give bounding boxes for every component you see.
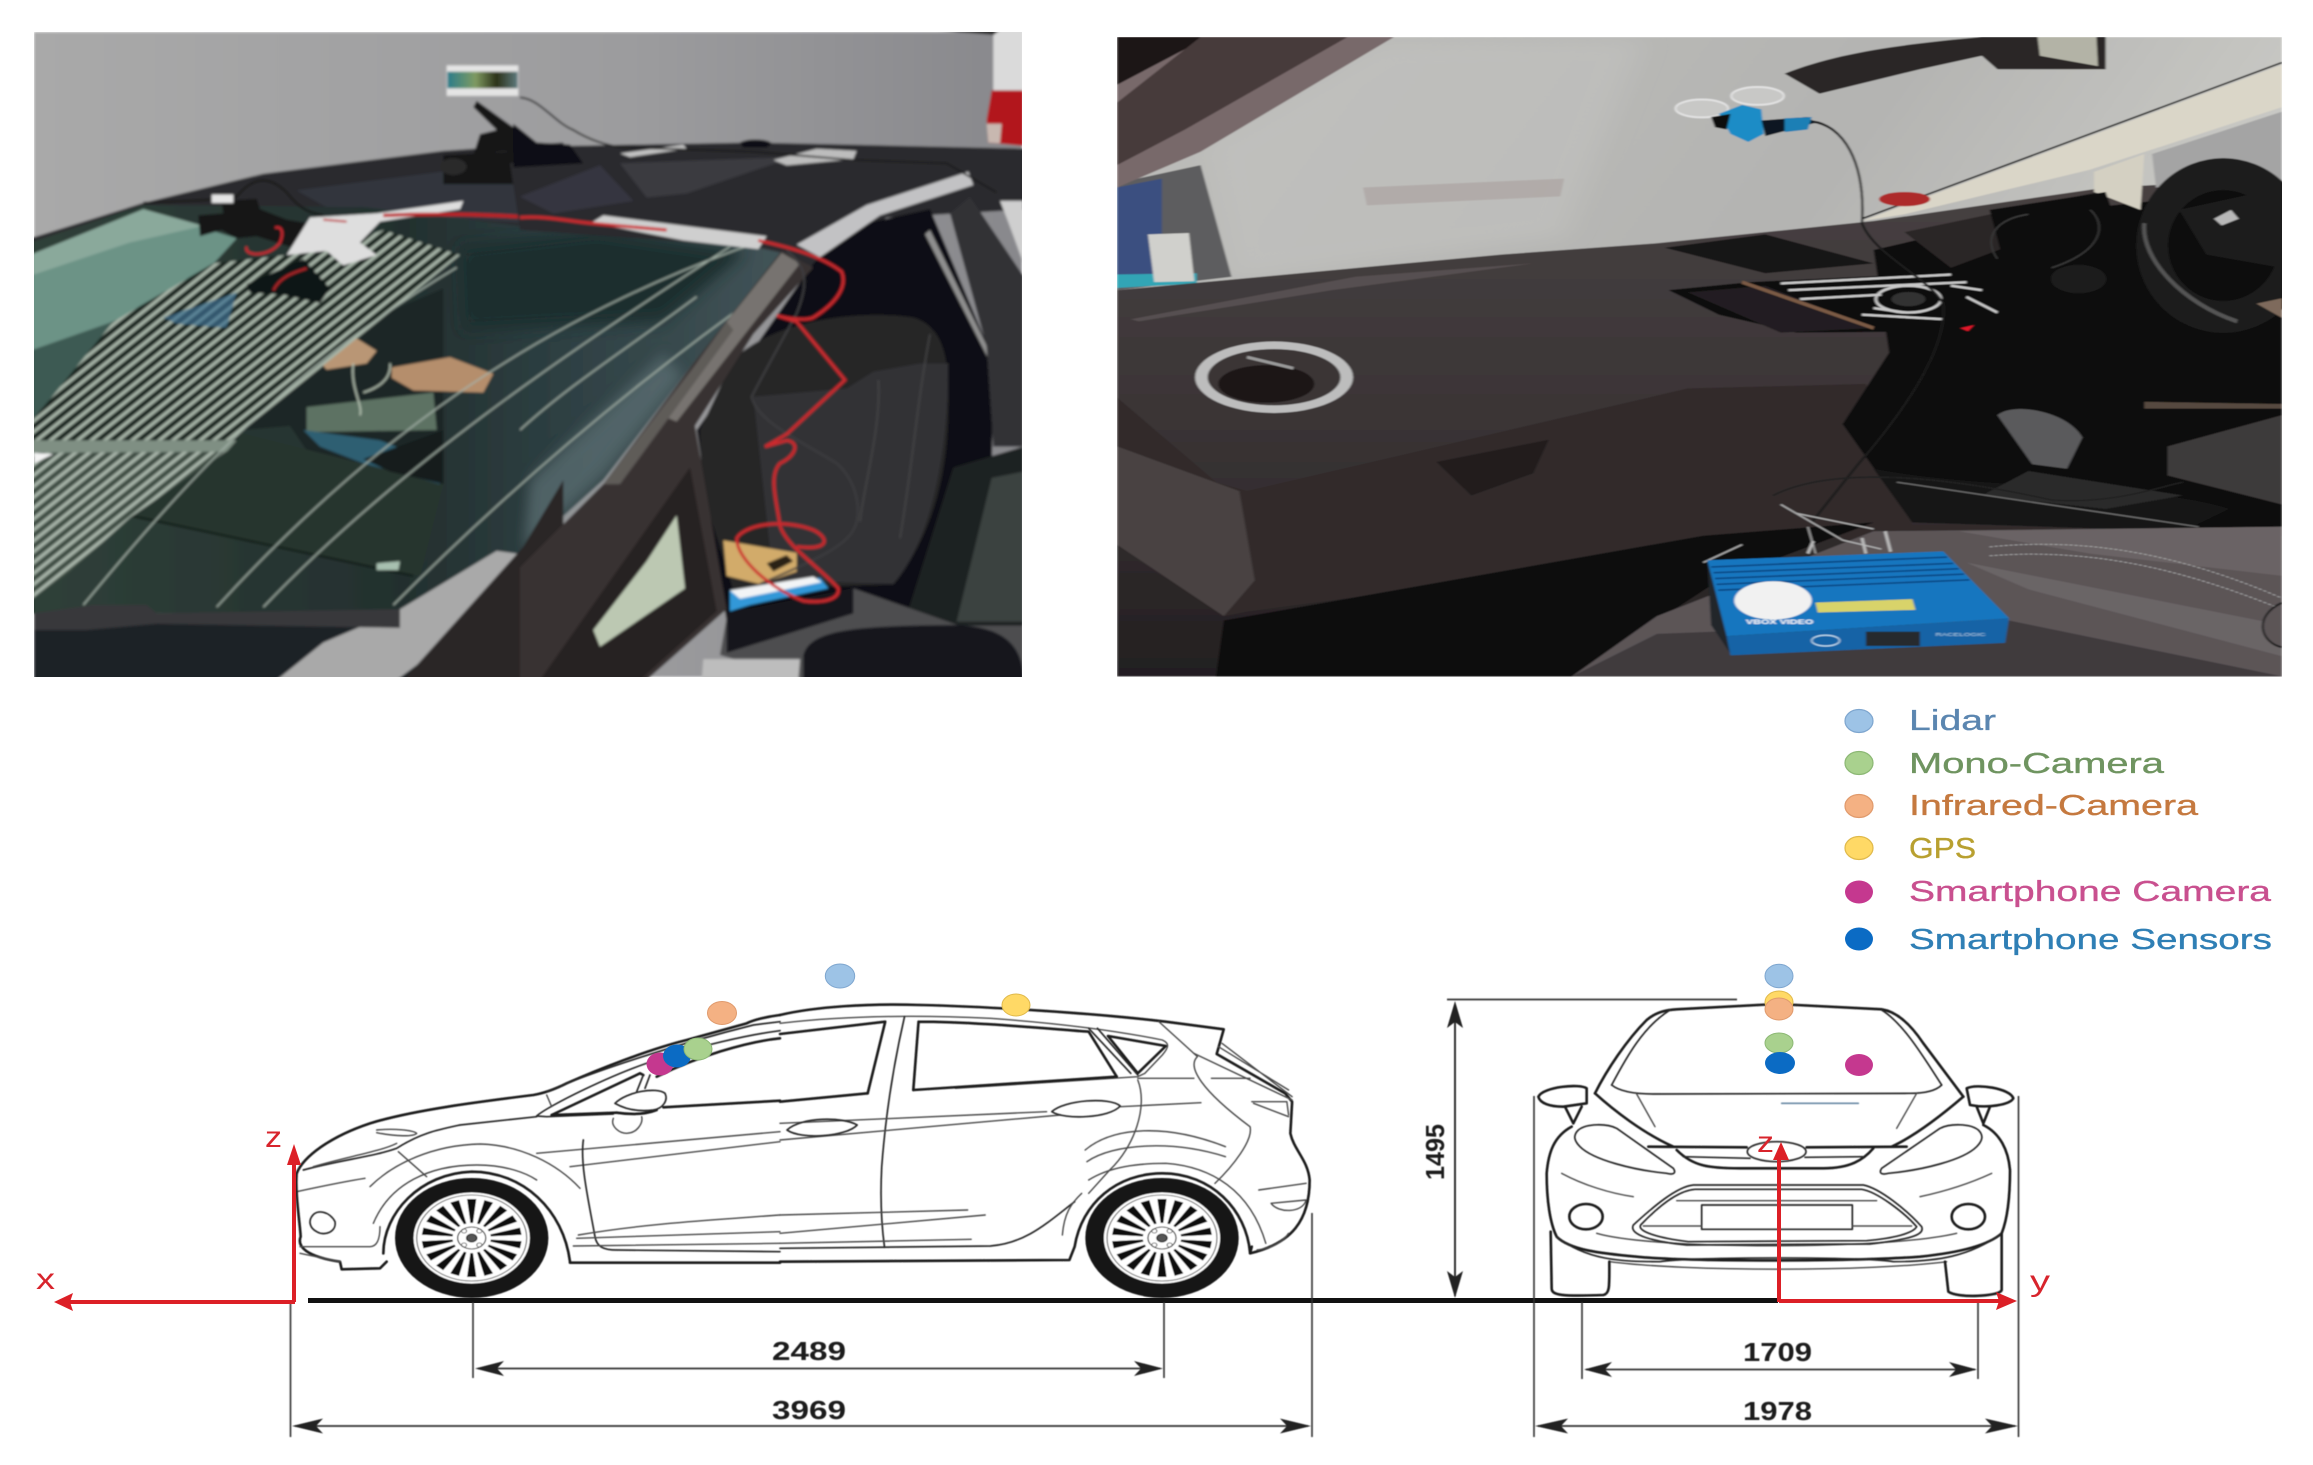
axis: y — [1779, 1265, 2050, 1310]
side view: rear half of car — [778, 1002, 1312, 1264]
marker: smartphone sensors front — [1765, 1052, 1795, 1074]
wall background — [34, 32, 1022, 677]
axis: x — [36, 1263, 295, 1311]
VBOX data logger: VBOX VIDEO — [1746, 618, 1813, 626]
photo: VBOX and camera mounted in car interior — [1117, 37, 2294, 676]
axis: z front — [1757, 1126, 1789, 1302]
passenger seat — [1572, 527, 2282, 676]
marker: smartphone sensors — [663, 1044, 691, 1068]
height dimension: 1495 — [1420, 1000, 1737, 1298]
VBOX data logger: RACELOGIC — [1935, 633, 1986, 638]
red sticker — [1879, 192, 1930, 206]
height dimension: 1495: 1495 — [1420, 1124, 1450, 1180]
instrument binnacle — [1990, 192, 2121, 277]
axis: z: z — [265, 1121, 282, 1154]
windshield background — [1125, 37, 2282, 290]
legend: Infrared-Camera: Infrared-Camera — [1909, 790, 2199, 822]
overall length dimension: 3969 — [290, 1213, 1312, 1437]
side view: front half of car — [296, 1013, 782, 1272]
red coordinate axes: front view — [1757, 1126, 2050, 1310]
centre console dark area — [1843, 188, 2282, 536]
legend: Mono-Camera: Mono-Camera — [1909, 748, 2165, 780]
side view car line drawing — [296, 1005, 1310, 1298]
striped sun shade on windshield — [30, 230, 460, 440]
overall width dimension: 1978 — [1534, 1096, 2018, 1437]
legend: GPS: GPS — [1909, 833, 1976, 865]
marker: lidar front — [1765, 964, 1793, 988]
sensor legend — [1845, 705, 2272, 956]
marker: lidar — [825, 964, 855, 988]
side view dimension lines — [290, 1213, 1312, 1437]
blue forward camera on suction mount — [1676, 100, 1728, 117]
track dimension: 1709 — [1582, 1302, 1978, 1379]
gear shifter and console — [1997, 409, 2082, 469]
wheelbase dimension: 2489: 2489 — [772, 1336, 846, 1366]
legend: Mono-Camera — [1845, 748, 2165, 780]
marker: smartphone camera — [646, 1052, 674, 1076]
photo: lidar and cameras mounted on car exterior — [30, 30, 1030, 680]
A-pillar — [520, 251, 813, 680]
sensor markers on front view — [1765, 964, 1873, 1076]
A-pillar trim and right window — [1862, 65, 2282, 221]
black cable from camera to box — [1812, 121, 1944, 522]
legend: Lidar — [1845, 705, 1996, 737]
sensor markers on side view — [646, 964, 1030, 1076]
marker: GPS — [1002, 994, 1030, 1016]
marker: GPS front — [1765, 991, 1793, 1013]
marker: mono camera front — [1765, 1033, 1793, 1053]
axis: z — [265, 1121, 301, 1302]
front view car line drawing — [1538, 1004, 2013, 1296]
legend: Smartphone Sensors — [1845, 924, 2272, 956]
ground line — [308, 1298, 1778, 1303]
left half of exterior photo: windshield — [34, 64, 781, 677]
VBOX data logger — [1707, 551, 2009, 655]
marker: infrared camera — [708, 1002, 736, 1024]
axis: y: y — [2030, 1265, 2050, 1298]
front wheel — [395, 1178, 548, 1298]
axis: x: x — [36, 1263, 55, 1296]
marker: mono camera — [684, 1038, 712, 1060]
legend: Smartphone Camera — [1845, 876, 2272, 908]
overall width dimension: 1978: 1978 — [1743, 1396, 1812, 1426]
dashboard round air vent — [1195, 342, 1353, 413]
air vent and radio controls — [1669, 272, 2005, 333]
wheelbase dimension: 2489 — [473, 1302, 1164, 1378]
legend: Smartphone Camera: Smartphone Camera — [1909, 876, 2272, 908]
rear view mirror — [1785, 37, 2106, 94]
overall length dimension: 3969: 3969 — [772, 1395, 846, 1425]
red coordinate axes: side view — [36, 1121, 301, 1311]
right half of exterior photo: door opening and red wire — [510, 32, 1022, 677]
person reflection in windshield — [248, 290, 442, 458]
steering wheel — [2152, 174, 2294, 317]
dashboard — [1117, 179, 2282, 676]
legend: Smartphone Sensors: Smartphone Sensors — [1909, 924, 2272, 956]
rear wheel — [1085, 1178, 1239, 1298]
legend: Lidar: Lidar — [1909, 705, 1996, 737]
track dimension: 1709: 1709 — [1743, 1337, 1812, 1367]
left outside view and pillar — [1117, 165, 1232, 290]
axis: z front: z — [1757, 1126, 1774, 1159]
marker: smartphone camera front — [1845, 1054, 1873, 1076]
legend: GPS — [1845, 833, 1976, 865]
marker: infrared camera front — [1765, 998, 1793, 1020]
legend: Infrared-Camera — [1845, 790, 2199, 822]
front view dimension lines — [1420, 1000, 2018, 1437]
